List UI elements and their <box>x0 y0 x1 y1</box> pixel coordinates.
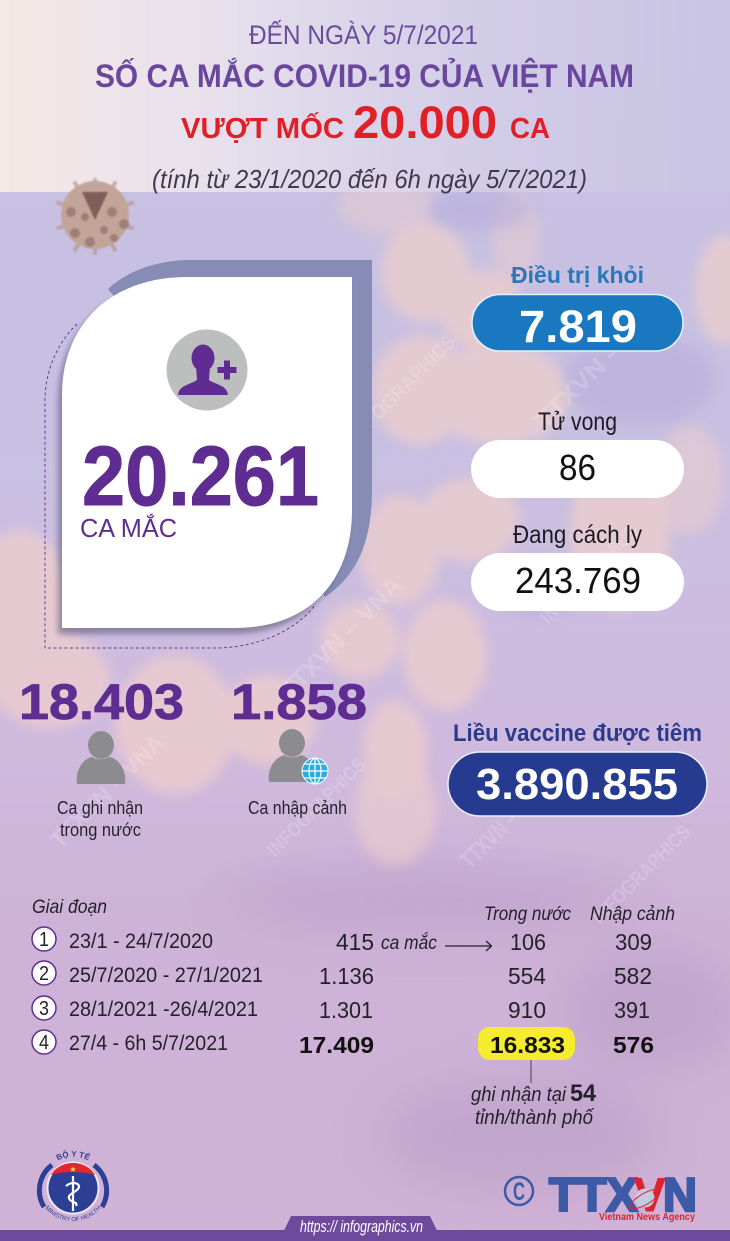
row 4: 27/4 - 6h 5/7/2021 <box>69 1032 228 1055</box>
row 1: 309 <box>615 929 652 955</box>
wordmark: N <box>663 1168 697 1221</box>
tagline: Vietnam News Agency <box>599 1211 695 1223</box>
logo: ministry of health: ★ <box>69 1165 77 1174</box>
row 4: 17.409 <box>299 1032 374 1058</box>
row 2: 1.136 <box>319 963 374 989</box>
copyright mark <box>505 1177 533 1205</box>
row 2: 554 <box>508 963 546 989</box>
column headers <box>32 897 675 925</box>
stat: domestic cases: trong nước <box>60 820 141 840</box>
row 1: ca mắc <box>381 933 437 954</box>
watermarks: INFOGRAPHICS <box>588 821 695 929</box>
callout: tỉnh/thành phố <box>475 1107 595 1129</box>
value: 18.403 <box>19 674 184 730</box>
footer url: https:// infographics.vn <box>300 1217 423 1236</box>
row 3: 28/1/2021 -26/4/2021 <box>69 998 258 1021</box>
row 1: 1 <box>39 929 49 951</box>
logo: ministry of health <box>36 1150 110 1222</box>
title line: milestone <box>181 97 550 148</box>
card shadow <box>58 283 348 634</box>
watermarks: TTXVN – VNA <box>455 777 552 874</box>
watermarks: TTXVN – VNA <box>45 729 170 854</box>
icon: person with globe <box>269 729 328 784</box>
pill <box>471 440 684 498</box>
footer <box>0 1216 730 1241</box>
column headers: Nhập cảnh <box>590 904 675 925</box>
row 4: 16.833 <box>490 1032 565 1058</box>
watermarks: TTXVN – VNA <box>275 572 407 704</box>
row 1: 106 <box>510 929 546 955</box>
row 3: 1.301 <box>319 997 373 1023</box>
stat: quarantine <box>471 521 684 611</box>
value: 86 <box>559 447 596 488</box>
callout <box>471 1060 597 1129</box>
row 4 <box>32 1027 654 1060</box>
label: Ca nhập cảnh <box>248 798 347 818</box>
wordmark: V <box>634 1168 666 1221</box>
row 3 <box>32 996 650 1023</box>
caption: CA MẮC <box>80 513 177 543</box>
watermarks: INFOGRAPHICS <box>346 331 461 446</box>
row 3: 3 <box>39 998 49 1020</box>
row 2: 25/7/2020 - 27/1/2021 <box>69 964 263 987</box>
wordmark: TTX <box>549 1168 638 1221</box>
title line: milestone: CA <box>510 113 550 145</box>
card back shape <box>108 260 372 597</box>
title line: milestone: 20.000 <box>353 97 497 148</box>
row 4: 576 <box>613 1032 654 1058</box>
title line: milestone: VƯỢT MỐC <box>181 111 344 145</box>
pill <box>471 553 684 611</box>
row 3: 391 <box>614 997 650 1023</box>
label: Tử vong <box>538 408 617 436</box>
row 2: 582 <box>614 963 652 989</box>
stat: domestic cases <box>19 674 184 840</box>
row 1 <box>32 927 652 955</box>
pill <box>472 294 683 351</box>
stat: recovered <box>472 262 683 352</box>
icon: person <box>77 731 125 784</box>
table: periods <box>32 897 675 1129</box>
big number: 20.261 <box>82 429 319 523</box>
stat: deaths <box>471 408 684 498</box>
label: Điều trị khỏi <box>511 262 644 288</box>
icon: person plus <box>166 330 248 410</box>
logo: TTXVN: C <box>513 1178 525 1206</box>
logo: ministry of health: BỘ Y TẾ <box>56 1150 91 1160</box>
dashed outline <box>45 324 315 648</box>
title line: date: ĐẾN NGÀY 5/7/2021 <box>249 19 478 50</box>
callout: ghi nhận tại <box>471 1084 567 1106</box>
arrow <box>445 941 492 951</box>
logo: TTXVN <box>505 1168 697 1223</box>
pill <box>448 752 707 816</box>
stat: vaccine doses <box>448 720 707 816</box>
header band <box>0 0 730 192</box>
label: Đang cách ly <box>513 521 642 549</box>
watermarks: TTXVN – VNA <box>530 291 673 434</box>
title block <box>95 19 634 194</box>
row 4: 4 <box>39 1032 49 1054</box>
callout: 54 <box>570 1080 597 1107</box>
value: 3.890.855 <box>476 760 678 809</box>
row 3: 910 <box>508 997 546 1023</box>
watermarks <box>45 291 695 929</box>
watermarks: INFOGRAPHICS <box>263 754 370 862</box>
globe <box>636 1188 654 1208</box>
white card <box>62 277 352 628</box>
row 2: 2 <box>39 963 49 985</box>
column headers: Trong nước <box>484 904 571 925</box>
label: Liều vaccine được tiêm <box>453 720 702 747</box>
label: Ca ghi nhận <box>57 798 143 818</box>
watermarks: INFOGRAPHICS <box>536 521 643 629</box>
title line: main: SỐ CA MẮC COVID-19 CỦA VIỆT NAM <box>95 58 634 94</box>
logo: ministry of health: MINISTRY OF HEALTH <box>45 1206 100 1222</box>
row 1: 415 <box>336 929 374 955</box>
stat: imported cases <box>231 674 367 818</box>
panel: total cases <box>45 260 372 648</box>
icon: virus <box>58 180 132 253</box>
row 1: 23/1 - 24/7/2020 <box>69 930 213 953</box>
value: 7.819 <box>519 301 637 352</box>
column headers: Giai đoạn <box>32 897 107 918</box>
value: 243.769 <box>515 560 641 601</box>
subtitle: (tính từ 23/1/2020 đến 6h ngày 5/7/2021) <box>152 164 587 194</box>
row 2 <box>32 961 652 989</box>
value: 1.858 <box>231 674 367 730</box>
